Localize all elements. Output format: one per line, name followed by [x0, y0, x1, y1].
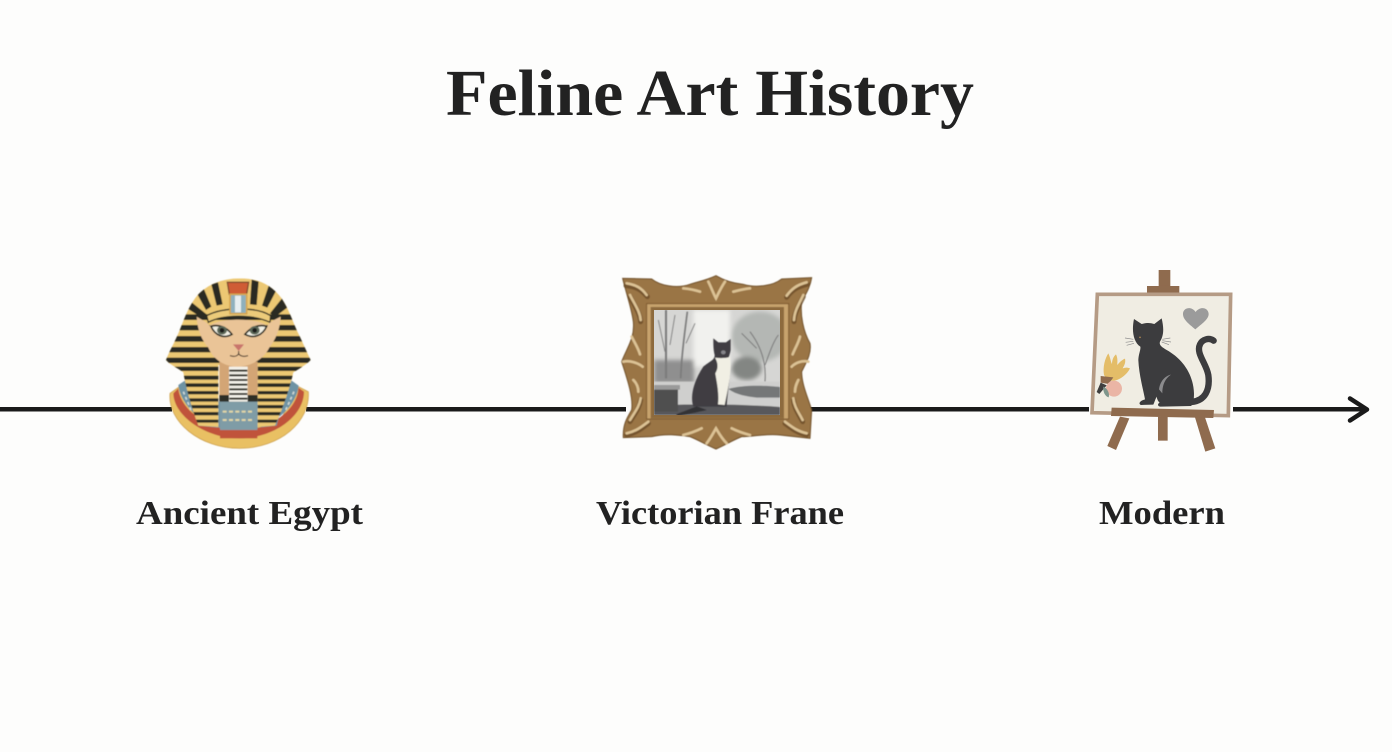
bare trees	[658, 310, 778, 382]
snowy ground	[654, 382, 780, 415]
easel shelf	[1111, 408, 1214, 418]
label: Victorian Frane: Victorian Frane	[596, 495, 844, 532]
cat face	[197, 317, 281, 367]
label: Modern: Modern	[1099, 495, 1225, 532]
black cat	[1125, 318, 1214, 407]
uraeus emblem	[227, 282, 249, 314]
label: Ancient Egypt: Ancient Egypt	[136, 495, 364, 532]
heart	[1183, 308, 1209, 329]
icon: ornate gilded picture frame	[622, 276, 812, 449]
easel	[1107, 270, 1215, 452]
headband	[207, 309, 271, 322]
timeline arrow	[0, 398, 1367, 420]
collar	[170, 379, 308, 448]
cat neck and necklace	[219, 362, 258, 402]
icon: modern cat painting on easel	[1092, 270, 1231, 452]
flower brush	[1097, 353, 1130, 397]
timeline infographic	[0, 70, 1370, 531]
gilded frame	[622, 276, 812, 449]
painted landscape	[654, 310, 788, 383]
nemes headdress	[165, 278, 312, 428]
icon: Egyptian cat pharaoh	[160, 275, 317, 448]
canvas	[1092, 294, 1231, 416]
title: Feline Art History	[446, 57, 974, 130]
painting of seated cat	[654, 310, 788, 416]
seated cat	[676, 338, 731, 416]
